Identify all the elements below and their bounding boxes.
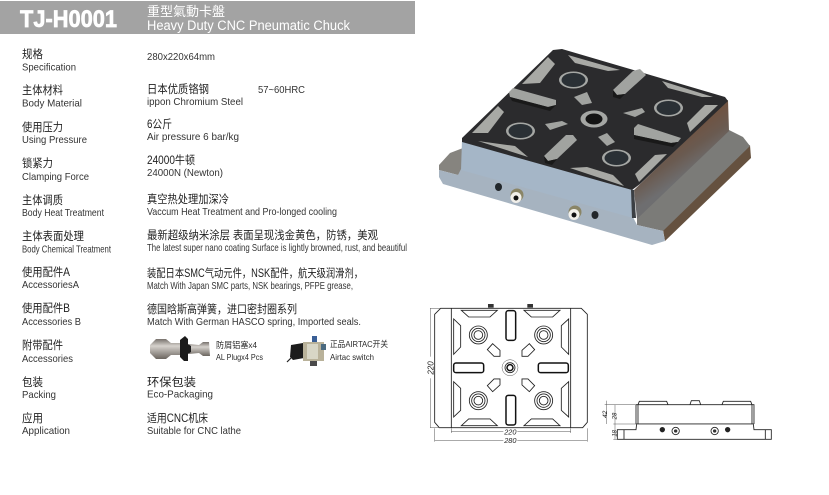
spec row: clamping force: 锁紧力	[22, 156, 53, 170]
spec row: packing: Packing	[22, 389, 56, 401]
bar shadows	[510, 90, 678, 165]
spec row: using pressure: 6公斤	[147, 118, 172, 131]
guide arrows	[545, 92, 645, 146]
spec row: specification: 规格	[22, 47, 43, 61]
spec row: accessories B: Match With German HASCO spring, Imported seals.	[147, 316, 361, 328]
dimension: 280 width: 280	[503, 436, 517, 445]
spec row: clamping force	[22, 153, 223, 183]
spec row: body chemical treatment: Body Chemical Treatment	[22, 244, 111, 256]
spec row: body chemical treatment: The latest super nano coating Surface is lightly browned, rust, and beautiful	[147, 242, 407, 254]
base plate left ledge	[439, 148, 463, 175]
spec row: packing: 包装	[22, 376, 43, 389]
header bar	[0, 1, 415, 34]
body front shadow edge	[631, 190, 636, 218]
top plate	[462, 49, 728, 190]
spec row: body chemical treatment: 最新超级纳米涂层 表面呈现浅金黄色，防锈，美观	[147, 228, 378, 242]
dimension: 220 width: 220	[503, 427, 517, 436]
front ports	[495, 183, 598, 220]
technical drawing: side view	[602, 401, 771, 439]
outline	[435, 308, 587, 428]
spec row: application: 应用	[22, 411, 43, 425]
clamp slots	[454, 311, 568, 425]
airtac caption: Airtac switch	[330, 352, 374, 362]
technical drawing: top view	[427, 304, 587, 445]
spec row: accessories B: 德国晗斯高弹簧，进口密封圈系列	[147, 302, 297, 316]
base plate front	[439, 169, 665, 245]
spec row: specification: 280x220x64mm	[147, 51, 215, 63]
model number: TJ-H0001	[20, 6, 117, 33]
dimension: 220 height: 220	[427, 361, 436, 376]
spec row: body material: ippon Chromium Steel	[147, 96, 243, 108]
spec row: body heat treatment: Vaccum Heat Treatment and Pro-longed cooling	[147, 206, 337, 218]
spec row: specification	[22, 47, 215, 74]
spec row: packing	[22, 375, 213, 401]
spec row: application: Application	[22, 425, 70, 437]
dimension: 220 height	[427, 308, 440, 428]
spec row: body material: 主体材料	[22, 83, 63, 97]
corner wedges	[454, 310, 569, 426]
base plate right edge	[663, 145, 751, 241]
spec row: clamping force: Clamping Force	[22, 171, 89, 183]
spec row: body heat treatment	[22, 192, 337, 219]
dimensions	[602, 401, 636, 439]
spec row: body heat treatment: Body Heat Treatment	[22, 207, 104, 219]
spec row: accessories: 附带配件	[22, 338, 63, 352]
spec row: accessories A	[22, 265, 363, 292]
spec row: body chemical treatment	[22, 228, 407, 256]
spec row: accessories A: 使用配件A	[22, 265, 70, 279]
centre bore	[502, 360, 518, 376]
spec row: accessories A: 装配日本SMC气动元件，NSK配件，航天级润滑剂，	[147, 266, 363, 280]
dimensions: 42	[602, 410, 609, 418]
spec row: packing: 环保包装	[147, 375, 197, 389]
plug caption	[216, 340, 263, 362]
spec row: clamping force: 24000N (Newton)	[147, 167, 223, 179]
spec row: accessories B: 使用配件B	[22, 301, 70, 315]
product render: pneumatic chuck	[439, 49, 751, 245]
guide arrows	[487, 344, 535, 392]
body front face	[461, 140, 634, 218]
english product title: Heavy Duty CNC Pneumatic Chuck	[147, 18, 350, 33]
spec row: application: Suitable for CNC lathe	[147, 425, 241, 437]
top fittings	[488, 304, 533, 308]
dimensions: 28	[613, 412, 619, 420]
spec row: using pressure	[22, 118, 239, 146]
spec row: clamping force: 24000牛顿	[147, 153, 195, 167]
base plate right ledge	[637, 130, 750, 231]
seat circles	[469, 326, 553, 410]
corner wedges	[472, 55, 718, 186]
ports	[660, 427, 730, 435]
spec row: using pressure: Air pressure 6 bar/kg	[147, 131, 239, 143]
spec row: specification: Specification	[22, 62, 76, 74]
spec row: body material: 日本优质铬钢	[147, 82, 209, 96]
clamp bars	[509, 69, 681, 161]
dimensions: 18	[613, 429, 619, 437]
top raised parts	[638, 401, 752, 405]
spec row: body heat treatment: 主体调质	[22, 193, 63, 207]
chinese product title: 重型氣動卡盤	[147, 4, 225, 19]
spec row: using pressure: Using Pressure	[22, 134, 87, 146]
airtac caption: 正品AIRTAC开关	[330, 339, 388, 349]
airtac caption	[330, 339, 388, 362]
spec row: accessories A: AccessoriesA	[22, 279, 79, 291]
dimension: 280 width	[435, 428, 587, 445]
spec row: body chemical treatment: 主体表面处理	[22, 229, 84, 243]
spec row: accessories	[22, 338, 73, 365]
spec row: application: 适用CNC机床	[147, 411, 208, 425]
spec row: accessories: Accessories	[22, 353, 73, 365]
spec row: packing: Eco-Packaging	[147, 388, 213, 400]
spec row: body material	[22, 82, 305, 110]
body outline	[636, 405, 754, 424]
spec row: body heat treatment: 真空热处理加深冷	[147, 192, 229, 206]
icon: airtac switch	[287, 336, 326, 366]
spec row: body material: 57~60HRC	[258, 84, 305, 96]
plug caption: AL Plugx4 Pcs	[216, 352, 263, 362]
dimension: 220 width	[451, 427, 571, 436]
plug caption: 防屑铝塞x4	[216, 340, 257, 350]
spec row: accessories A: Match With Japan SMC parts, NSK bearings, PFPE grease,	[147, 280, 353, 292]
spec row: accessories B: Accessories B	[22, 316, 81, 328]
spec row: application	[22, 411, 241, 437]
icon: aluminium plug	[150, 336, 210, 361]
spec row: accessories B	[22, 301, 361, 328]
spec row: using pressure: 使用压力	[22, 120, 63, 134]
spec row: body material: Body Material	[22, 98, 82, 110]
seat rings	[506, 72, 683, 166]
body side face	[634, 100, 729, 219]
